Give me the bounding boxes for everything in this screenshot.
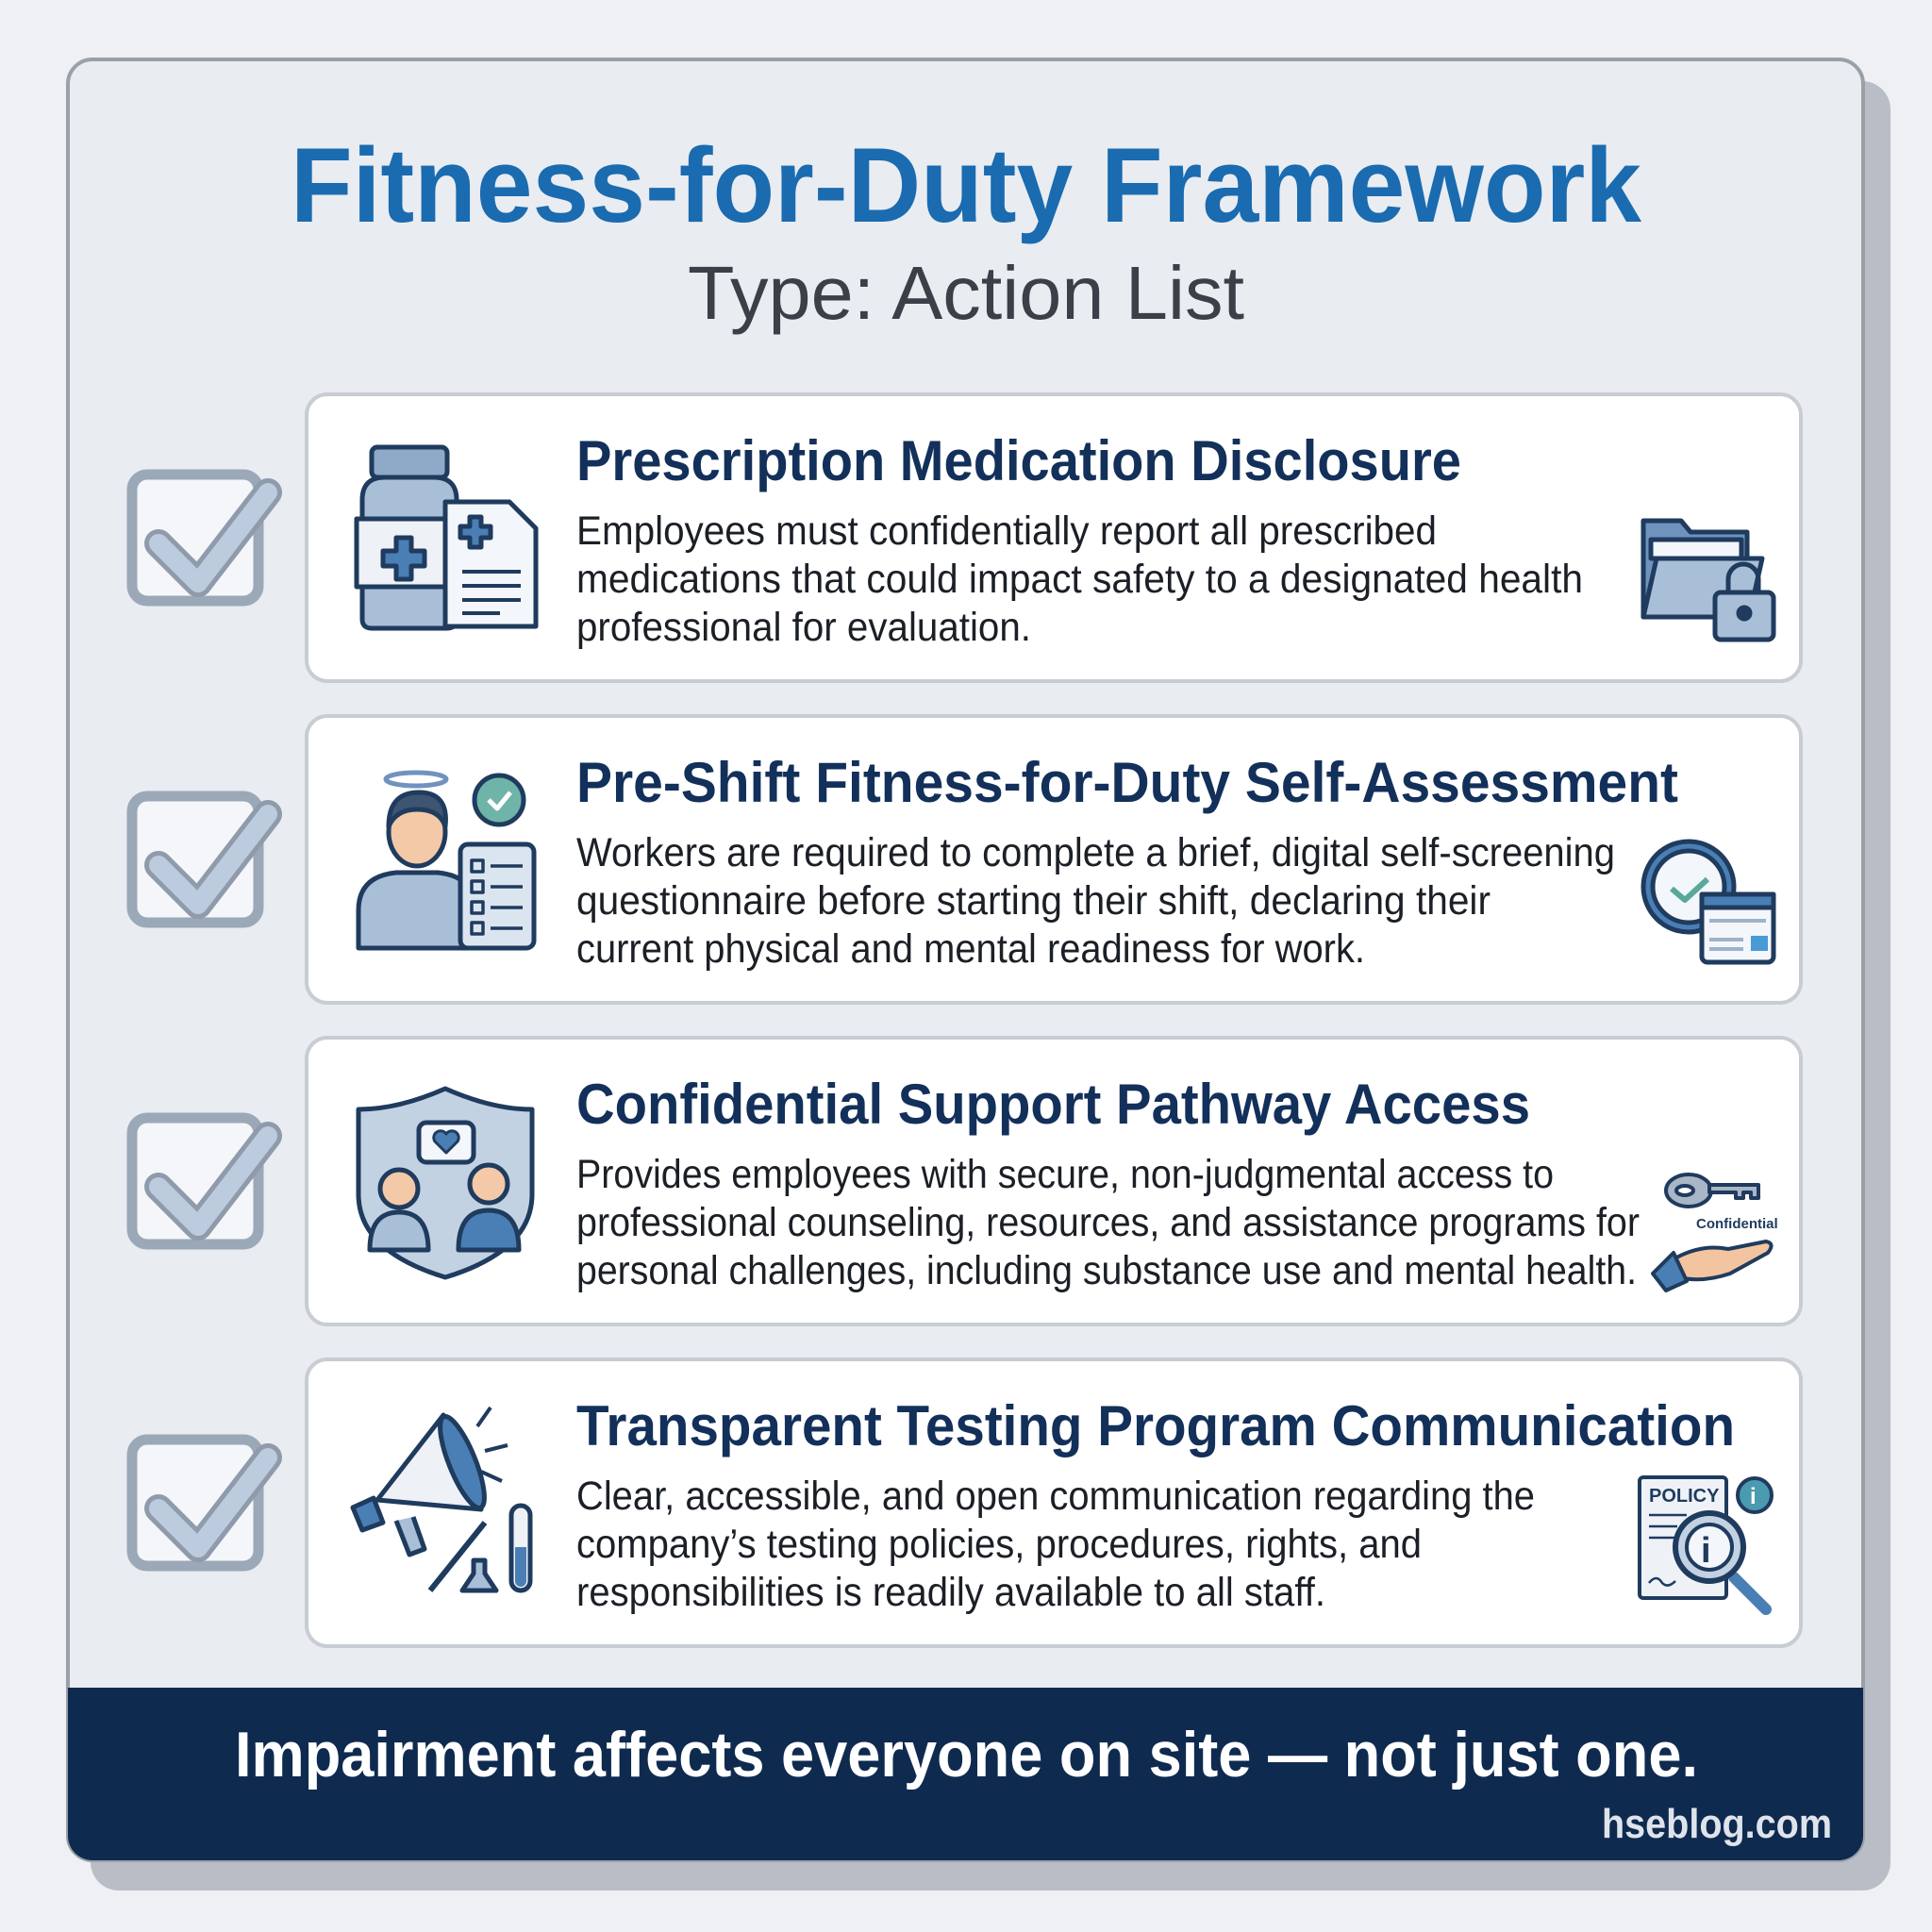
- item 4: [132, 1359, 1801, 1646]
- body 4: [576, 1474, 1535, 1615]
- footer band: [68, 1688, 1863, 1860]
- body 3: professional counseling, resources, and assistance programs for: [576, 1200, 1640, 1245]
- icon: shield with two people: [358, 1089, 532, 1277]
- body 1: professional for evaluation.: [576, 605, 1031, 650]
- icon: policy document with magnifier: i: [1750, 1484, 1757, 1509]
- body 2: current physical and mental readiness for work.: [576, 926, 1365, 972]
- checkbox 4: [132, 1440, 268, 1566]
- icon: policy document with magnifier: i: [1701, 1531, 1711, 1571]
- body 3: Provides employees with secure, non-judgmental access to: [576, 1152, 1554, 1197]
- checkbox 2: [132, 796, 268, 923]
- body 2: Workers are required to complete a brief, digital self-screening: [576, 830, 1615, 875]
- item 3: [132, 1038, 1801, 1324]
- heading 2: Pre-Shift Fitness-for-Duty Self-Assessment: [576, 751, 1678, 814]
- icon: medication bottle and prescription: [357, 447, 536, 628]
- body 2: questionnaire before starting their shift, declaring their: [576, 878, 1491, 924]
- body 2: [576, 830, 1615, 972]
- heading 4: Transparent Testing Program Communication: [576, 1394, 1735, 1457]
- icon: policy document with magnifier: POLICY: [1649, 1486, 1720, 1507]
- body 4: responsibilities is readily available to all staff.: [576, 1570, 1325, 1615]
- item 2: [132, 716, 1801, 1003]
- source credit: hseblog.com: [1602, 1801, 1832, 1847]
- footer message: Impairment affects everyone on site — not just one.: [235, 1719, 1698, 1790]
- card 3: [307, 1038, 1801, 1324]
- checkbox 1: [132, 475, 268, 601]
- card 4: [307, 1359, 1801, 1646]
- card 1: [307, 394, 1801, 681]
- icon: clock and screen: [1643, 841, 1774, 962]
- icon: key in hand, confidential: [1653, 1174, 1778, 1291]
- heading 3: Confidential Support Pathway Access: [576, 1073, 1530, 1136]
- body 4: Clear, accessible, and open communication regarding the: [576, 1474, 1535, 1519]
- subtitle: Type: Action List: [688, 251, 1244, 335]
- title: Fitness-for-Duty Framework: [291, 126, 1642, 244]
- heading 1: Prescription Medication Disclosure: [576, 429, 1461, 492]
- icon: worker with digital checklist: [358, 773, 534, 948]
- icon: locked folder: [1643, 521, 1774, 640]
- body 1: medications that could impact safety to a designated health: [576, 557, 1583, 602]
- card 2: [307, 716, 1801, 1003]
- body 3: personal challenges, including substance use and mental health.: [576, 1248, 1637, 1293]
- body 1: [576, 508, 1583, 650]
- icon: policy document with magnifier: [1640, 1477, 1772, 1609]
- checkbox 3: [132, 1118, 268, 1244]
- body 1: Employees must confidentially report all prescribed: [576, 508, 1437, 554]
- body 4: company’s testing policies, procedures, rights, and: [576, 1522, 1422, 1567]
- item 1: [132, 394, 1801, 681]
- body 3: [576, 1152, 1640, 1293]
- icon: megaphone and test tubes: [353, 1407, 530, 1591]
- icon: key in hand, confidential: Confidential: [1696, 1216, 1778, 1232]
